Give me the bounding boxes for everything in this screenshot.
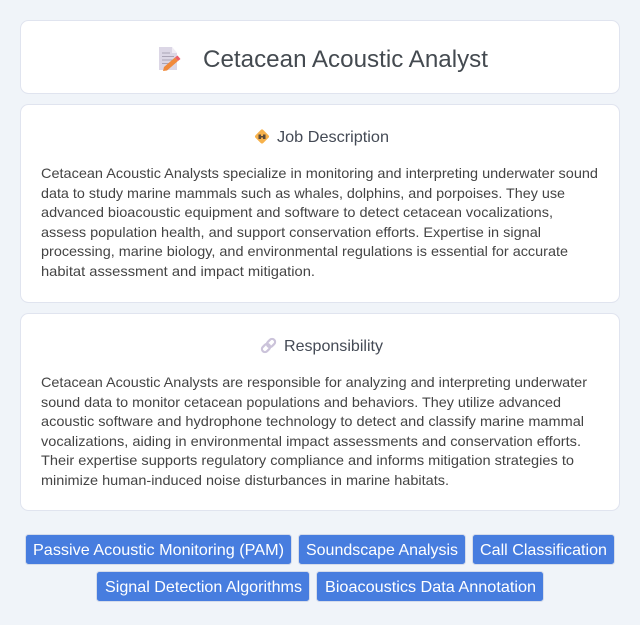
tag: Passive Acoustic Monitoring: Passive Acoustic Monitoring (PAM) bbox=[33, 542, 284, 559]
text block: responsibility: minimize human-induced noise disturbances in marine habitats. bbox=[41, 472, 449, 488]
text block: job description: habitat assessment and impact mitigation. bbox=[41, 263, 315, 279]
title: Cetacean Acoustic Analyst bbox=[203, 46, 488, 73]
tag: Signal Detection Algorithms bbox=[96, 572, 310, 602]
text block: job description bbox=[41, 165, 598, 279]
icon: document with pencil bbox=[159, 47, 180, 71]
tag: Soundscape Analysis bbox=[298, 534, 466, 564]
heading: job description: Job Description bbox=[277, 129, 389, 146]
text block: responsibility: acoustic software and hydrophone technology to detect and classify marine mammal bbox=[41, 413, 584, 429]
tag: Call Classification bbox=[472, 534, 614, 564]
heading: responsibility: Responsibility bbox=[284, 338, 383, 355]
text block: job description: Cetacean Acoustic Analysts specialize in monitoring and interpreting underwater sound bbox=[41, 165, 598, 181]
tag: Soundscape Analysis: Soundscape Analysis bbox=[306, 542, 458, 559]
text block: job description: advanced bioacoustic equipment and software to detect cetacean vocalizations, bbox=[41, 204, 553, 220]
panel: responsibility bbox=[20, 314, 620, 510]
tag: Bioacoustics Data Annotation: Bioacoustics Data Annotation bbox=[325, 579, 536, 596]
tag: Signal Detection Algorithms: Signal Detection Algorithms bbox=[105, 579, 302, 596]
text block: responsibility: vocalizations, aiding in environmental impact assessments and conservation efforts. bbox=[41, 433, 581, 449]
icon: orange diamond bbox=[254, 129, 270, 144]
text block: responsibility: Cetacean Acoustic Analysts are responsible for analyzing and interpreting underwater bbox=[41, 374, 587, 390]
text block: responsibility bbox=[41, 374, 587, 488]
text block: responsibility: Their expertise supports regulatory compliance and informs mitigation strategies to bbox=[41, 452, 574, 468]
text block: job description: assess population health, and support conservation efforts. Expertise in signal bbox=[41, 224, 541, 240]
text block: responsibility: sound data to monitor cetacean populations and behaviors. They utilize advanced bbox=[41, 394, 561, 410]
panel: job description bbox=[20, 104, 620, 302]
text block: job description: processing, marine biology, and environmental regulations is essential for accurate bbox=[41, 243, 568, 259]
text block: job description: data to study marine mammals such as whales, dolphins, and porpoises. They use bbox=[41, 185, 565, 201]
tag: Call Classification: Call Classification bbox=[480, 542, 607, 559]
tag: Passive Acoustic Monitoring bbox=[26, 534, 292, 564]
tag: Bioacoustics Data Annotation bbox=[316, 572, 544, 602]
icon: chain link bbox=[261, 338, 276, 353]
panel: title card bbox=[20, 20, 620, 94]
